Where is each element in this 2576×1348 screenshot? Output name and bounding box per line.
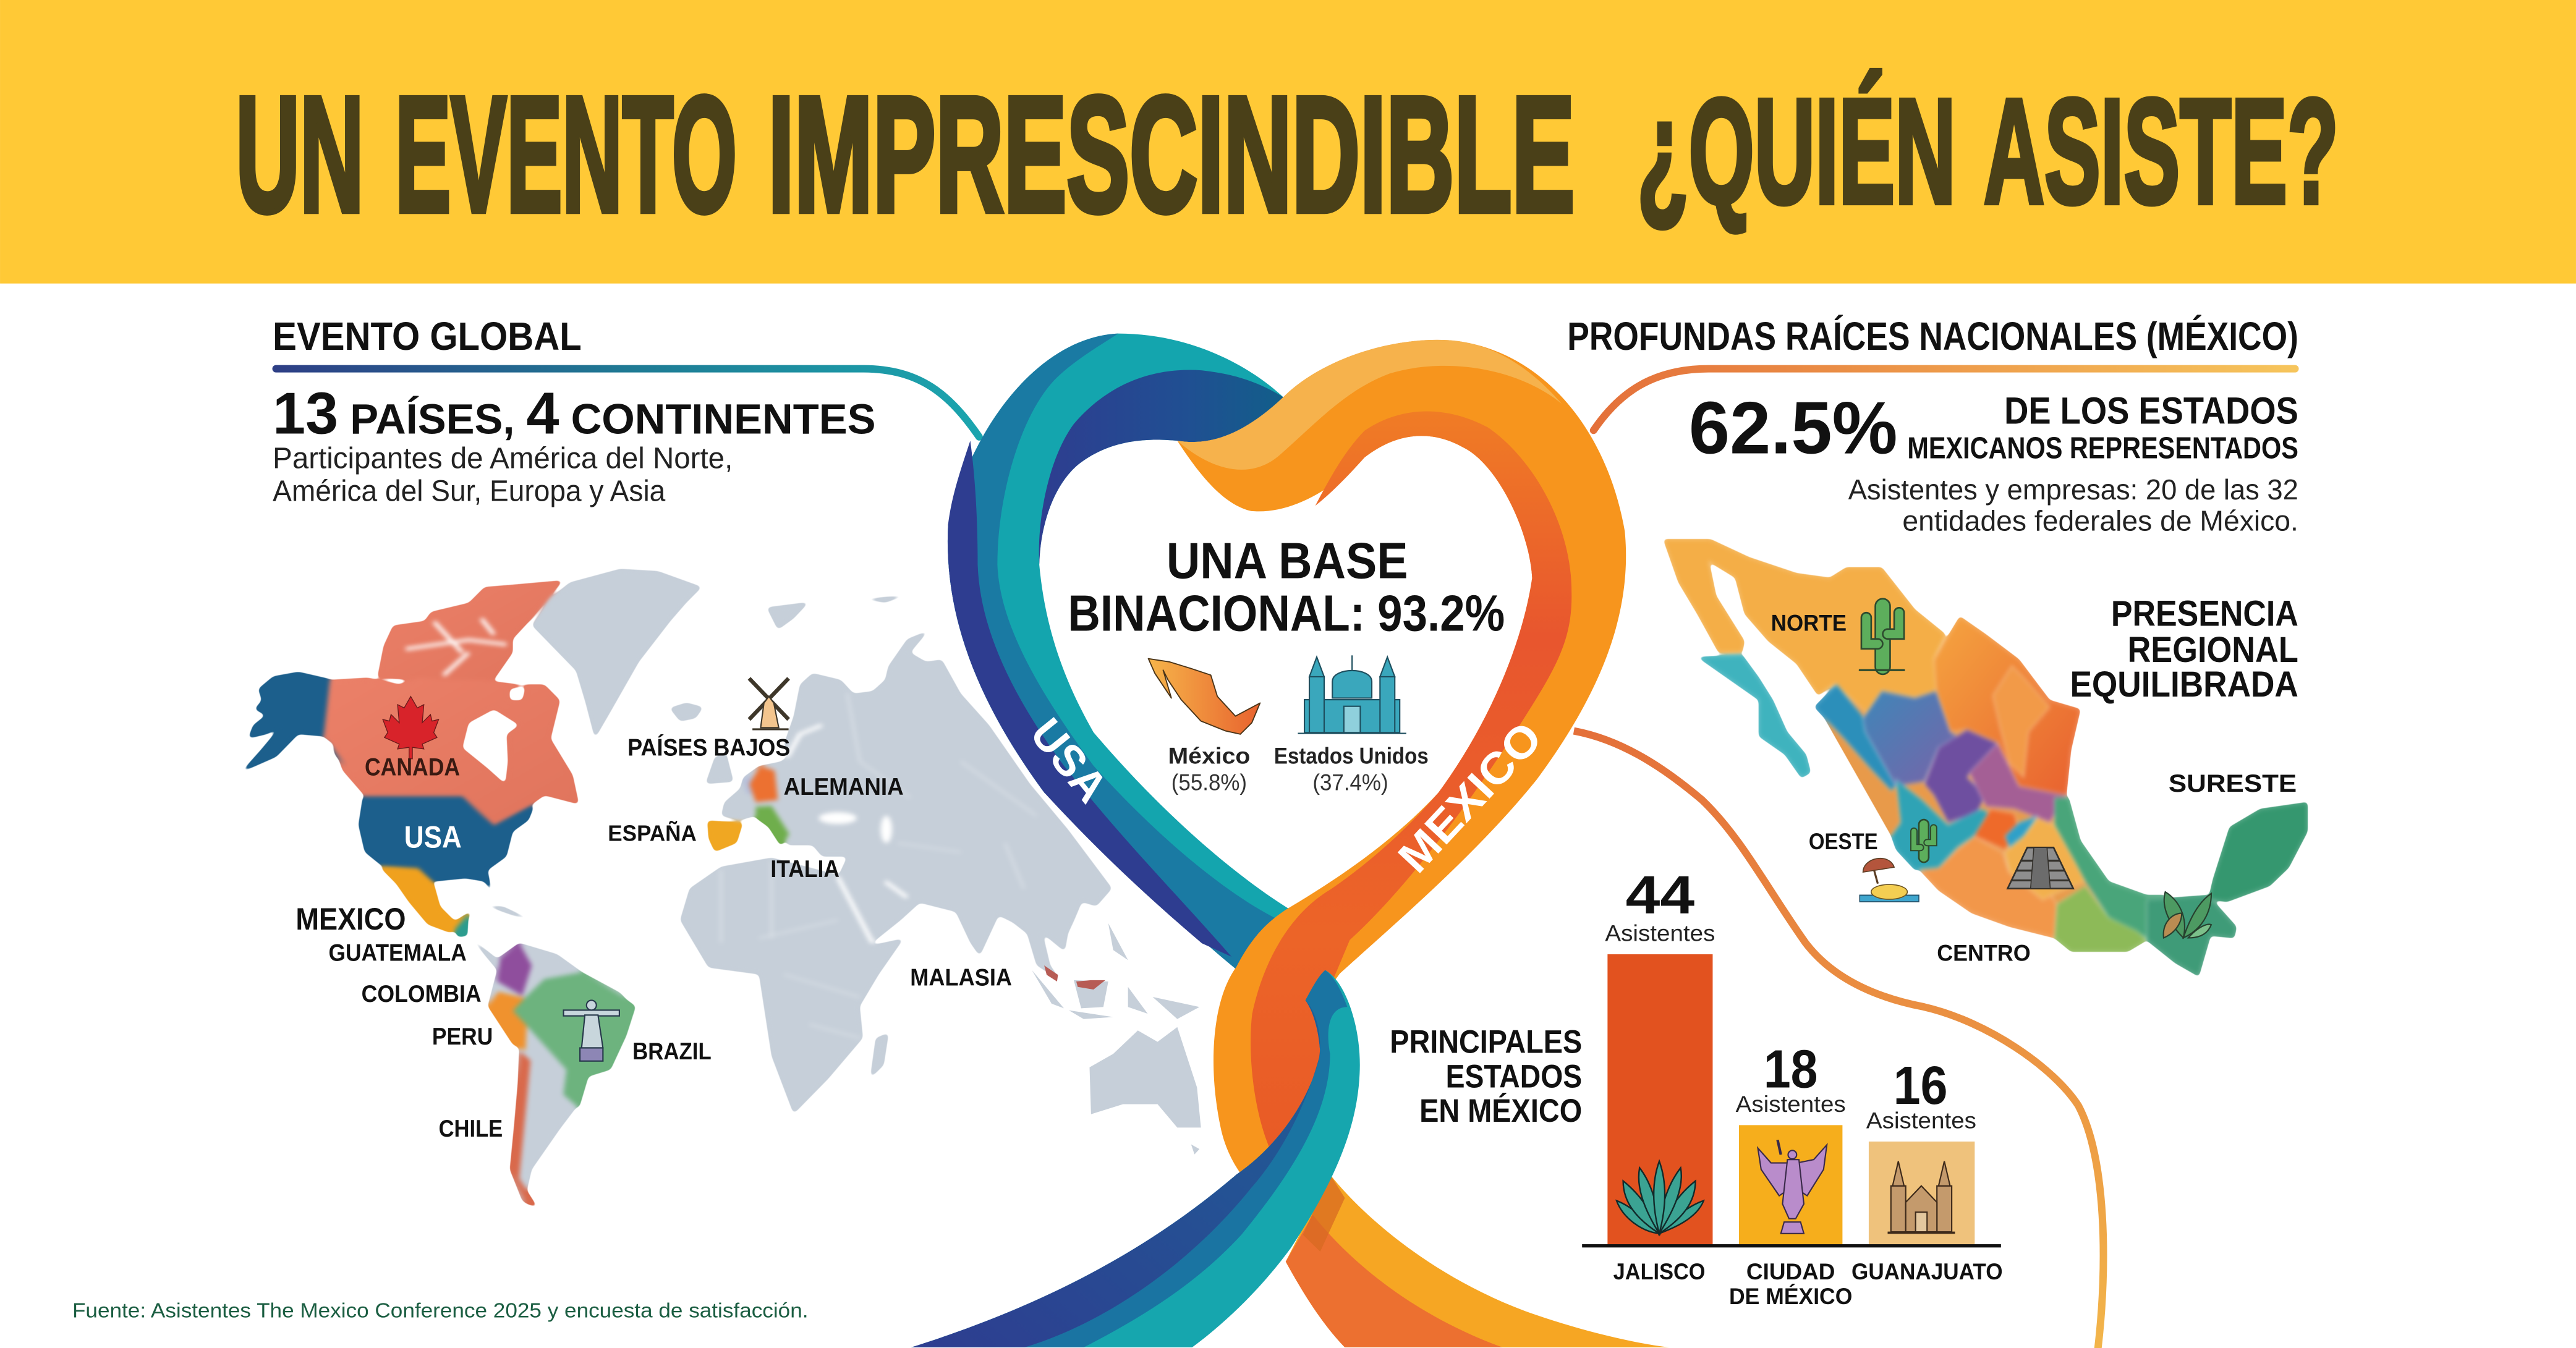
- connector line: global: [276, 369, 979, 437]
- map regions: [1663, 539, 2308, 977]
- greenland: [532, 569, 702, 739]
- occidente: [1891, 779, 1991, 870]
- panel: raices nacionales: [1567, 314, 2298, 705]
- italy: [756, 806, 789, 847]
- australia: [1089, 1027, 1201, 1155]
- label alemania: ALEMANIA: [784, 774, 904, 800]
- description line 2: entidades federales de México.: [1902, 504, 2298, 536]
- iceland: [670, 703, 704, 721]
- value mexico share: (55.8%): [1171, 769, 1247, 795]
- durango: [1863, 691, 1962, 786]
- sur pacifico: [1919, 836, 2057, 938]
- bar guanajuato: [1869, 1142, 1975, 1245]
- icon: beach umbrella: [1860, 858, 1919, 902]
- usa ribbon: upper loop: [948, 334, 1291, 973]
- stat 62.5: 62.5%: [1689, 387, 1897, 469]
- panel: evento global: [273, 314, 875, 508]
- label de mexico: DE MÉXICO: [1729, 1283, 1852, 1309]
- label usa: USA: [404, 819, 462, 854]
- label colombia: COLOMBIA: [362, 981, 482, 1007]
- zacatecas: [1924, 729, 1998, 823]
- label espana: ESPAÑA: [608, 821, 697, 846]
- heart ribbon: [911, 334, 1669, 1347]
- ribbon label mexico: MEXICO: [1389, 713, 1552, 882]
- icon: cathedral: [1298, 655, 1406, 734]
- label mexico share: México: [1168, 743, 1250, 769]
- malaysia: [1044, 965, 1105, 990]
- icon: christ statue: [564, 1000, 619, 1061]
- heading line 2: BINACIONAL: 93.2%: [1068, 585, 1505, 642]
- france benelux: [743, 775, 756, 795]
- heading line 2: ESTADOS: [1446, 1058, 1582, 1095]
- bar chart: [1582, 865, 2003, 1309]
- silhouette underlay: [1818, 641, 2147, 940]
- alaska: [240, 672, 346, 773]
- mexico ribbon: main: [1177, 340, 1626, 1174]
- guanajuato: [1974, 809, 2019, 850]
- description line 1: Asistentes y empresas: 20 de las 32: [1848, 473, 2298, 506]
- description line 1: Participantes de América del Norte,: [273, 442, 733, 475]
- heading line 1: PRINCIPALES: [1390, 1024, 1582, 1060]
- caribbean: [482, 904, 538, 922]
- san luis potosi: [1970, 743, 2067, 823]
- icon: agave: [1617, 1161, 1704, 1234]
- svalbard: [767, 595, 911, 630]
- oaxaca: [2054, 886, 2147, 952]
- panel: principales estados: [1390, 865, 2003, 1309]
- description line 2: América del Sur, Europa y Asia: [273, 475, 666, 508]
- arctic channels: [406, 619, 506, 676]
- icon: mexico mini map: [1149, 659, 1260, 734]
- title banner: [0, 0, 2576, 284]
- guatemala: [455, 914, 469, 938]
- mexico ribbon: tail: [1286, 1174, 1669, 1347]
- eurasia: [721, 630, 1112, 981]
- icon: church: [1887, 1161, 1955, 1232]
- label usa share: Estados Unidos: [1274, 743, 1429, 769]
- label sureste: SURESTE: [2169, 770, 2297, 797]
- unit 18: Asistentes: [1736, 1091, 1846, 1117]
- unit 16: Asistentes: [1866, 1108, 1976, 1134]
- bar jalisco: [1607, 954, 1712, 1245]
- label paises bajos: PAÍSES BAJOS: [627, 734, 790, 761]
- title: un evento imprescindible: [236, 62, 1575, 246]
- label malasia: MALASIA: [910, 964, 1012, 991]
- stat caption 2: MEXICANOS REPRESENTADOS: [1907, 431, 2298, 465]
- mexico regional map: [1663, 539, 2308, 977]
- value 44: 44: [1626, 865, 1694, 925]
- brazil: [513, 972, 636, 1108]
- stat: 13 paises 4 continentes: 13 PAÍSES, 4 CONTINENTES: [273, 381, 875, 447]
- canada mainland: [324, 677, 579, 825]
- label guatemala: GUATEMALA: [329, 940, 467, 967]
- label canada: CANADA: [365, 753, 460, 781]
- icon: jungle plant: [2164, 892, 2211, 938]
- heading: PROFUNDAS RAÍCES NACIONALES (MÉXICO): [1567, 314, 2298, 358]
- icon: windmill: [749, 679, 789, 729]
- label italia: ITALIA: [770, 856, 840, 883]
- baja sur: [1698, 655, 1811, 778]
- heading line 1: UNA BASE: [1167, 532, 1408, 589]
- connector line: national: [1594, 369, 2295, 430]
- sinaloa: [1814, 684, 1896, 791]
- heading: evento global: EVENTO GLOBAL: [273, 314, 582, 358]
- icon: cactus oeste: [1914, 824, 1934, 857]
- bar ciudad de mexico: [1739, 1125, 1842, 1245]
- africa: [680, 857, 904, 1114]
- title: un evento imprescindible: IMPRESCINDIBLE: [768, 62, 1575, 246]
- label peru: PERU: [432, 1024, 493, 1050]
- south america: [467, 935, 633, 1208]
- unit 44: Asistentes: [1605, 920, 1715, 946]
- uk and ireland: [705, 752, 734, 784]
- southeast asia islands: [1032, 923, 1199, 1019]
- label brazil: BRAZIL: [632, 1038, 712, 1065]
- connector line: states: [1574, 731, 2104, 1348]
- map shapes: [240, 569, 1112, 1208]
- norte: [1663, 539, 1945, 716]
- usa ribbon: lower loop: [911, 970, 1360, 1347]
- centro: [2005, 818, 2085, 899]
- canada arctic: [377, 580, 563, 684]
- yucatan: [2208, 802, 2308, 902]
- stat caption 1: DE LOS ESTADOS: [2004, 390, 2298, 432]
- value 16: 16: [1894, 1055, 1947, 1116]
- map shapes: oceania: [1032, 923, 1201, 1155]
- regional heading 1: PRESENCIA: [2111, 594, 2298, 634]
- label centro: CENTRO: [1937, 940, 2031, 966]
- icon: pyramid: [2007, 847, 2073, 889]
- label jalisco: JALISCO: [1613, 1258, 1706, 1284]
- regional heading 2: REGIONAL: [2127, 630, 2298, 670]
- icon: maple leaf: [383, 697, 439, 759]
- madagascar: [870, 1033, 889, 1079]
- label oeste: OESTE: [1809, 828, 1878, 854]
- mexico: [379, 867, 472, 933]
- heading line 3: EN MÉXICO: [1419, 1092, 1582, 1129]
- chile: [510, 1051, 538, 1208]
- ribbon label usa: USA: [1021, 710, 1117, 812]
- regional heading 3: EQUILIBRADA: [2070, 664, 2298, 705]
- value 18: 18: [1764, 1038, 1818, 1099]
- veracruz: [2054, 797, 2166, 940]
- peru: [488, 992, 527, 1051]
- chiapas: [2147, 895, 2237, 977]
- icon: angel statue: [1758, 1140, 1827, 1234]
- germany: [749, 766, 778, 802]
- chart axis: [1582, 1244, 2001, 1247]
- map labels: [295, 734, 1012, 1142]
- label guanajuato: GUANAJUATO: [1851, 1258, 2003, 1284]
- world map: [240, 569, 1201, 1208]
- panel: binational base: [1068, 532, 1505, 795]
- icon: cactus norte: [1860, 606, 1904, 670]
- title: un evento imprescindible: EVENTO: [395, 62, 737, 246]
- nuevo leon: [1993, 666, 2050, 777]
- label chile: CHILE: [439, 1116, 503, 1142]
- colombia: [497, 943, 532, 996]
- queretaro: [2005, 816, 2038, 847]
- noreste: [1934, 616, 2080, 795]
- inland seas and borders: [721, 693, 1037, 1038]
- title: quien asiste: ¿QUIÉN: [1637, 68, 1956, 235]
- label norte: NORTE: [1771, 609, 1847, 635]
- title: un evento imprescindible: UN: [236, 62, 364, 246]
- value usa share: (37.4%): [1312, 769, 1388, 795]
- source note: Fuente: Asistentes The Mexico Conference 2025 y encuesta de satisfacción.: [72, 1299, 809, 1322]
- spain: [707, 820, 743, 852]
- usa mainland: [359, 797, 535, 895]
- label mexico: MEXICO: [295, 901, 406, 936]
- label ciudad: CIUDAD: [1746, 1258, 1835, 1284]
